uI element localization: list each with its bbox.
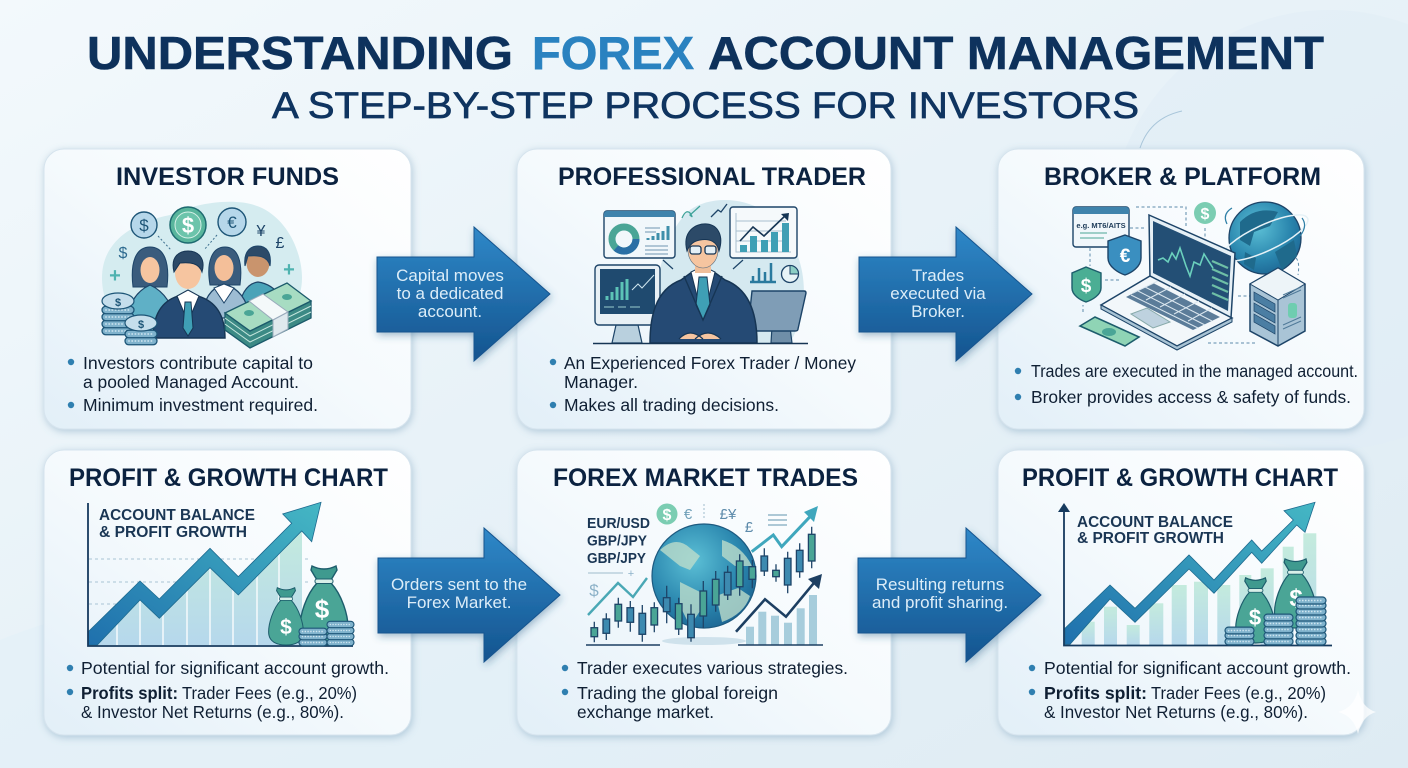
bullets: forex market trades: exchange market.: [577, 702, 714, 722]
title: ACCOUNT MANAGEMENT: [708, 27, 1324, 79]
bullets: professional trader: [550, 353, 856, 415]
panel: professional trader: [517, 149, 891, 429]
bar and line chart: account growth: $: [1249, 605, 1261, 630]
line chart: account balance growth: ACCOUNT BALANCE: [99, 507, 255, 524]
heading: investor funds: INVESTOR FUNDS: [116, 163, 339, 191]
bullets: profit split: & Investor Net Returns (e.g., 80%).: [1044, 702, 1308, 722]
illustration: globe and candlesticks: £¥: [720, 506, 737, 523]
arrow: trades executed: Trades: [912, 266, 964, 285]
illustration: globe and candlesticks: GBP/JPY: [587, 551, 646, 567]
heading: forex market trades: FOREX MARKET TRADES: [553, 464, 858, 492]
arrow: trades executed: Broker.: [911, 302, 965, 321]
illustration: globe and candlesticks: [586, 504, 823, 645]
bullets: forex market trades: Trader executes various strategies.: [577, 658, 848, 678]
bullets: investor funds: [68, 353, 318, 415]
bar and line chart: account growth: & PROFIT GROWTH: [1077, 530, 1224, 547]
title: [87, 27, 1324, 79]
bullets: investor funds: a pooled Managed Account.: [83, 372, 299, 392]
icon: laptop, globe and server: €: [1120, 246, 1131, 267]
icon: investors with money: $: [138, 319, 144, 331]
illustration: globe and candlesticks: GBP/JPY: [587, 534, 647, 550]
illustration: globe and candlesticks: €: [684, 506, 693, 523]
arrow: orders sent: Orders sent to the: [391, 575, 527, 594]
icon: investors with money: +: [283, 259, 295, 281]
bullets: broker and platform: [1015, 361, 1358, 407]
icon: investors with money: $: [182, 213, 194, 238]
illustration: globe and candlesticks: +: [628, 568, 634, 580]
arrow: capital moves: to a dedicated: [397, 284, 503, 303]
panel: profit and growth chart (left): [44, 450, 411, 735]
icon: investors with money: +: [109, 265, 121, 287]
bullets: investor funds: Minimum investment required.: [83, 395, 318, 415]
arrow: trades executed: [859, 227, 1032, 361]
bullets: professional trader: An Experienced Forex Trader / Money: [564, 353, 856, 373]
arrow: orders sent: Forex Market.: [407, 593, 511, 612]
heading: profit and growth chart: PROFIT & GROWTH CHART: [1022, 464, 1338, 492]
icon: laptop, globe and server: $: [1081, 276, 1092, 297]
arrow: resulting returns: Resulting returns: [876, 575, 1004, 594]
arrow: resulting returns: [858, 528, 1041, 662]
icon: laptop, globe and server: $: [1201, 206, 1210, 223]
heading: broker and platform: BROKER & PLATFORM: [1044, 163, 1321, 191]
icon: investors with money: ¥: [256, 223, 266, 240]
bar and line chart: account growth: ACCOUNT BALANCE: [1077, 514, 1233, 531]
arrow: capital moves: Capital moves: [396, 266, 504, 285]
bullets: broker and platform: Trades are executed in the managed account.: [1031, 361, 1358, 381]
arrow: capital moves: [377, 227, 550, 361]
bullets: forex market trades: [562, 658, 848, 722]
illustration: globe and candlesticks: EUR/USD: [587, 516, 650, 532]
icon: investors with money: $: [119, 245, 128, 262]
bullets: forex market trades: Trading the global foreign: [577, 683, 778, 703]
bullets: investor funds: Investors contribute capital to: [83, 353, 313, 373]
illustration: globe and candlesticks: £: [745, 519, 754, 536]
line chart: account balance growth: & PROFIT GROWTH: [99, 524, 247, 541]
icon: investors with money: $: [115, 297, 121, 309]
icon: investors with money: $: [139, 216, 149, 235]
icon: trader with screens: [593, 200, 808, 344]
bar and line chart: account growth: $: [1289, 585, 1303, 612]
bullets: professional trader: Manager.: [564, 372, 638, 392]
bullets: profit split: Profits split:: [1044, 683, 1147, 703]
icon: sparkle: [1338, 690, 1376, 734]
illustration: globe and candlesticks: $: [589, 581, 599, 600]
bullets: profit split: Trader Fees (e.g., 20%): [182, 683, 357, 703]
bullets: profit split: [67, 658, 389, 722]
arrow: orders sent: [378, 528, 560, 662]
title: UNDERSTANDING: [87, 27, 513, 79]
bullets: profit split: Potential for significant account growth.: [81, 658, 389, 678]
arrow: capital moves: account.: [418, 302, 482, 321]
icon: investors with money: €: [227, 213, 237, 232]
bullets: profit split: Potential for significant account growth.: [1044, 658, 1351, 678]
heading: professional trader: PROFESSIONAL TRADER: [558, 163, 866, 191]
bullets: professional trader: Makes all trading decisions.: [564, 395, 779, 415]
arrow: resulting returns: and profit sharing.: [872, 593, 1008, 612]
bullets: profit split: [1029, 658, 1351, 722]
line chart: account balance growth: $: [315, 594, 330, 624]
subtitle: A STEP-BY-STEP PROCESS FOR INVESTORS: [272, 85, 1139, 126]
icon: investors with money: £: [276, 235, 285, 252]
line chart: account balance growth: [88, 502, 354, 646]
heading: profit and growth chart: PROFIT & GROWTH CHART: [69, 464, 388, 492]
icon: laptop, globe and server: e.g. MT6/AITS: [1076, 221, 1126, 230]
panel: investor funds: [44, 149, 411, 429]
bullets: broker and platform: Broker provides access & safety of funds.: [1031, 387, 1351, 407]
title: FOREX: [532, 27, 694, 79]
panel: profit and growth chart (right): [998, 450, 1364, 735]
panel: forex market trades: [517, 450, 891, 735]
bullets: profit split: Profits split:: [81, 683, 178, 703]
icon: investors with money: [102, 202, 311, 348]
bullets: profit split: & Investor Net Returns (e.g., 80%).: [81, 702, 344, 722]
icon: laptop, globe and server: [1072, 202, 1313, 350]
arrow: trades executed: executed via: [890, 284, 986, 303]
bullets: profit split: Trader Fees (e.g., 20%): [1151, 683, 1326, 703]
line chart: account balance growth: $: [280, 616, 292, 639]
panel: broker and platform: [998, 149, 1364, 429]
illustration: globe and candlesticks: $: [663, 507, 672, 524]
bar and line chart: account growth: [1058, 502, 1332, 646]
